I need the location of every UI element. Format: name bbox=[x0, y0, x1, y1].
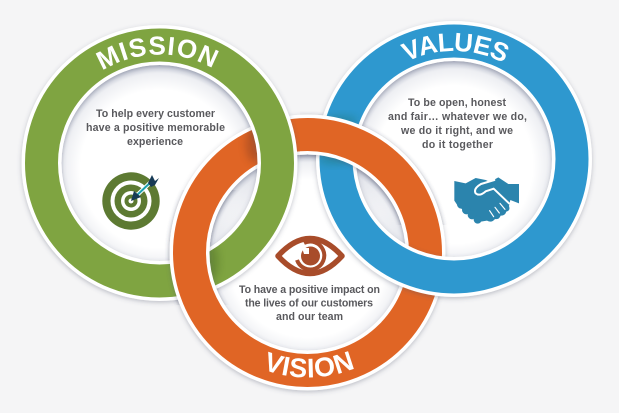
icon: target with arrow bbox=[102, 172, 160, 230]
heading: vision: VISION bbox=[268, 351, 354, 378]
inner discs bbox=[60, 59, 554, 352]
text: mission statement: To help every customer bbox=[96, 108, 215, 120]
ring: vision over mission crossing bbox=[167, 190, 236, 305]
ring: vision over values crossing bbox=[300, 114, 445, 225]
text: values statement: we do it right, and we bbox=[400, 125, 513, 137]
ring: values bbox=[318, 41, 572, 277]
text: values statement bbox=[388, 97, 527, 151]
text: vision statement: and our team bbox=[276, 311, 343, 323]
text: vision statement: the lives of our customers bbox=[245, 298, 373, 310]
text: values statement: do it together bbox=[422, 139, 493, 151]
ring: mission bbox=[42, 45, 278, 281]
icon: eye bbox=[278, 238, 342, 274]
text: mission statement: experience bbox=[127, 136, 183, 148]
heading: values: VALUES bbox=[400, 32, 508, 61]
heading: mission: MISSION bbox=[96, 36, 219, 70]
text: vision statement: To have a positive impact on bbox=[239, 284, 380, 296]
icon: handshake bbox=[454, 177, 519, 224]
text: vision statement bbox=[239, 284, 380, 323]
text: values statement: To be open, honest bbox=[408, 97, 506, 109]
ring: vision (under layer) bbox=[190, 126, 426, 370]
text: mission statement bbox=[86, 108, 225, 148]
text: mission statement: have a positive memorable bbox=[86, 122, 225, 134]
text: values statement: and fair… whatever we do, bbox=[388, 111, 527, 123]
